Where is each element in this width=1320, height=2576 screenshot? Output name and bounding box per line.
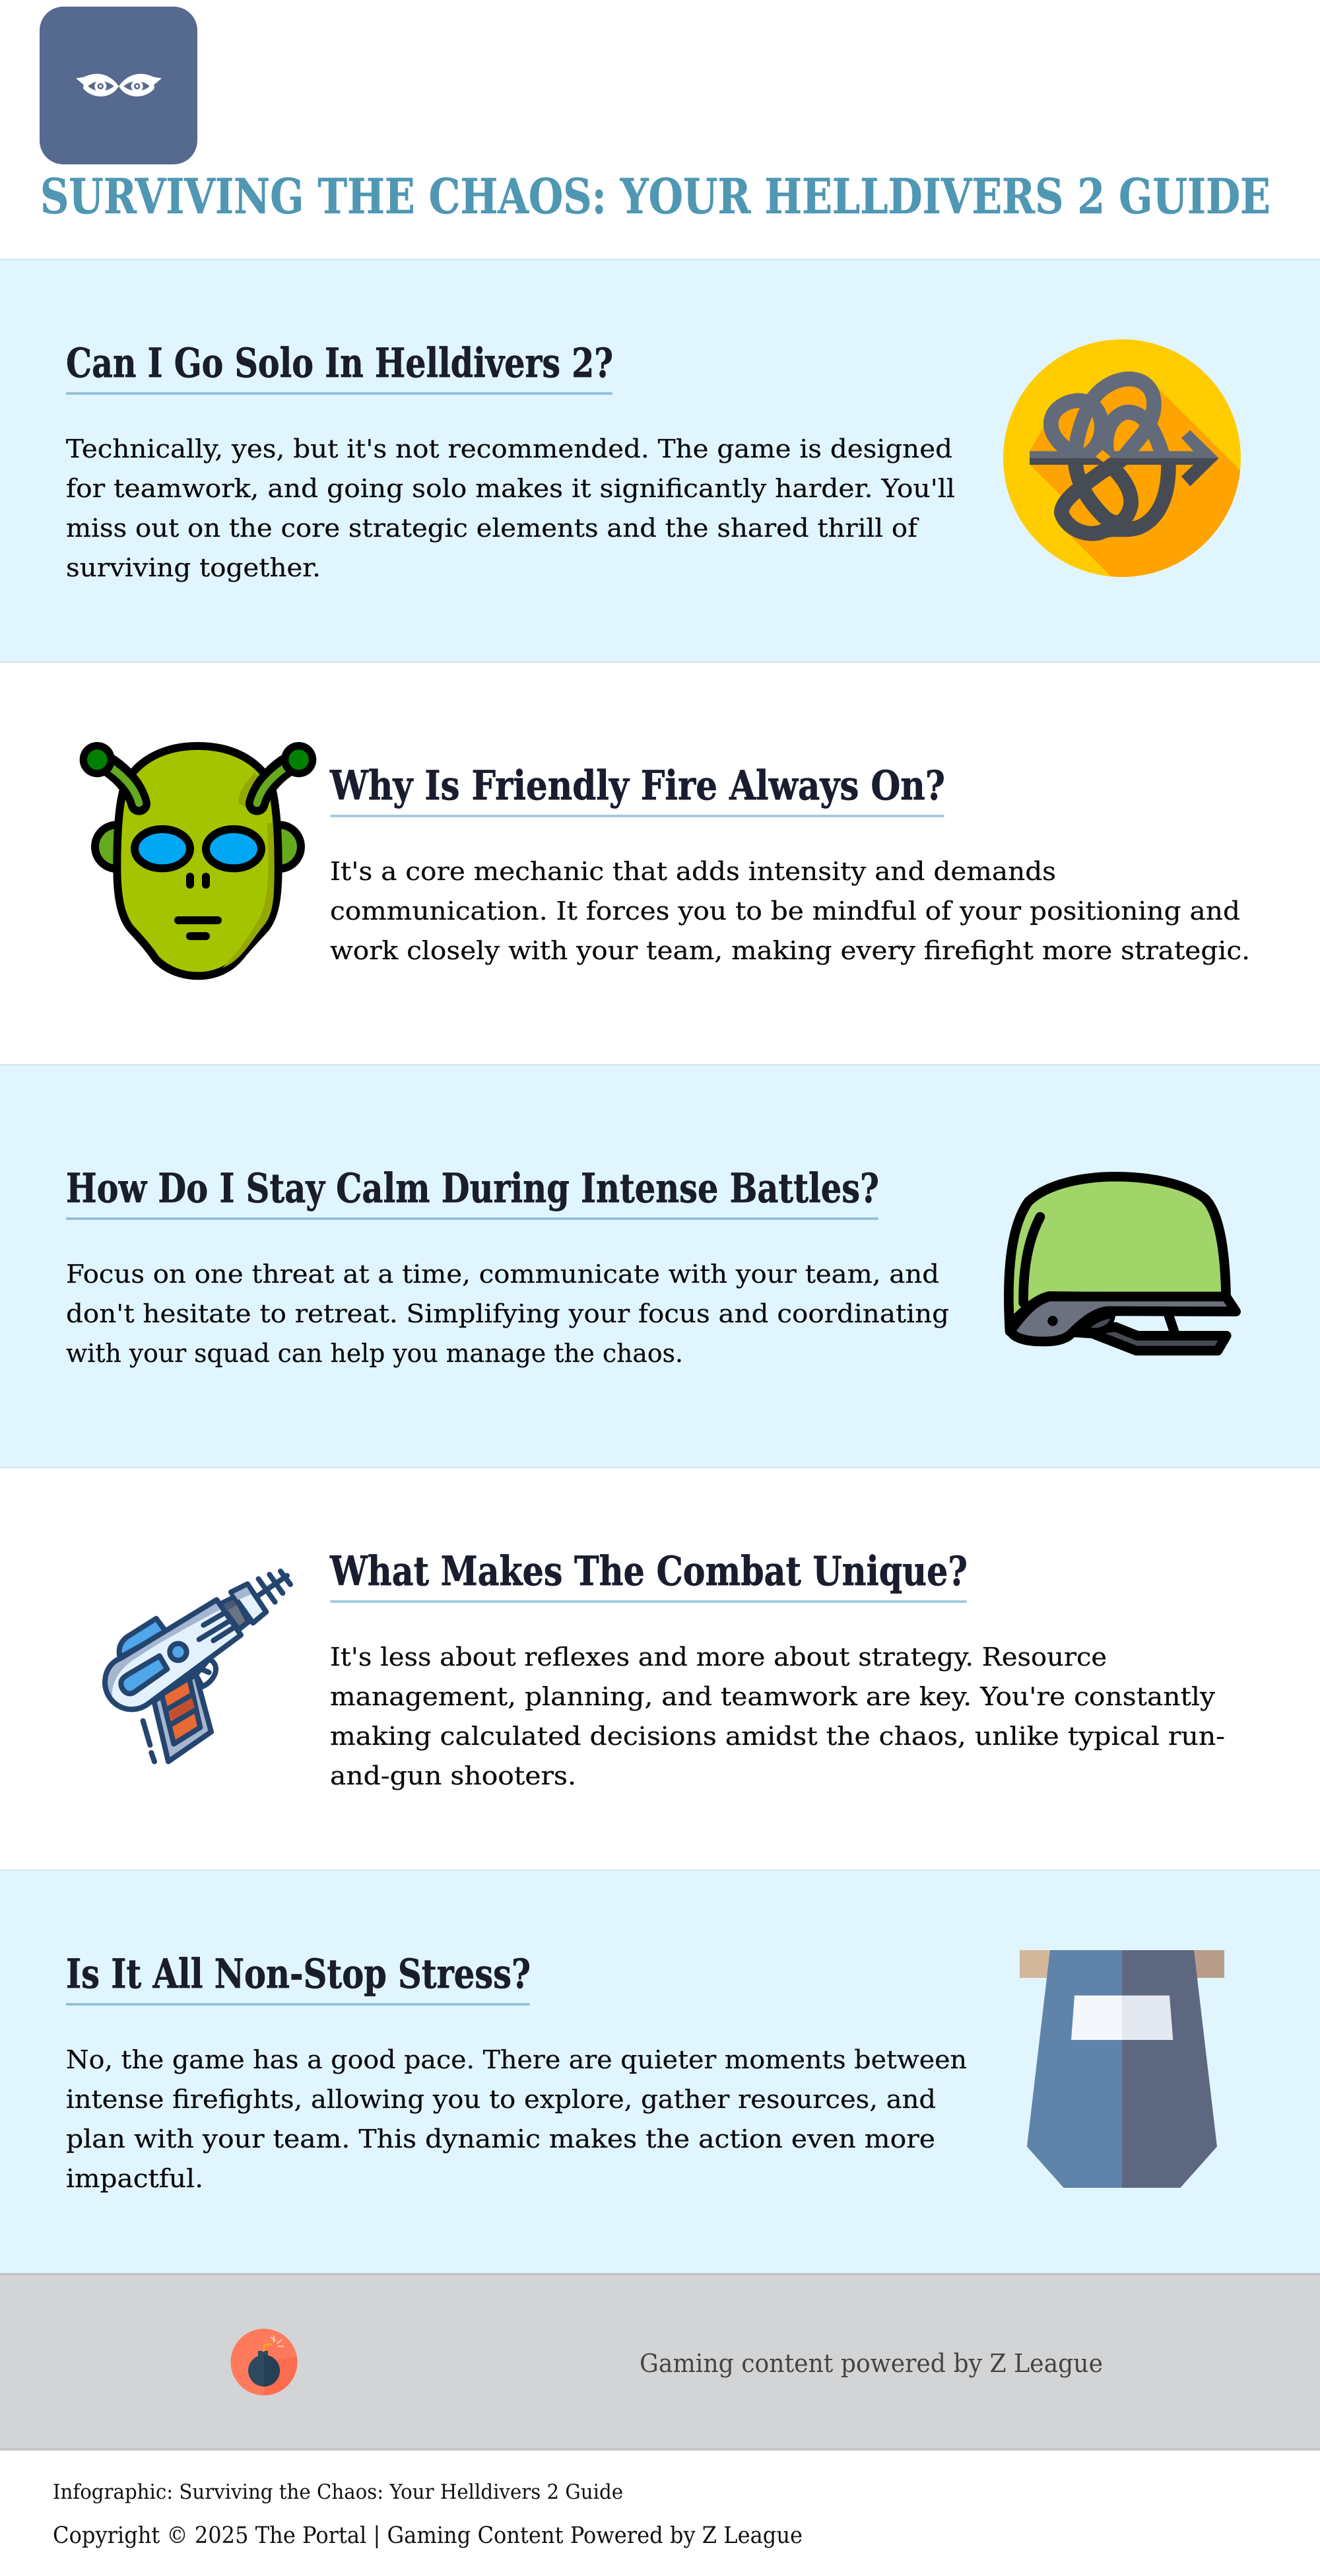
text: non-stop stress: plan with your team. This dynamic makes the action even more <box>66 2124 935 2153</box>
heading: stay calm: How Do I Stay Calm During Intense Battles? <box>66 1165 879 1212</box>
icon: helmet <box>1008 1176 1236 1351</box>
text: stay calm: with your squad can help you manage the chaos. <box>66 1339 683 1368</box>
icon: bomb <box>231 2329 298 2395</box>
text: non-stop stress: impactful. <box>66 2164 203 2193</box>
footer band text: Gaming content powered by Z League <box>640 2349 1103 2378</box>
text: combat unique: making calculated decisions amidst the chaos, unlike typical run- <box>330 1722 1225 1751</box>
text: non-stop stress: intense firefights, allowing you to explore, gather resources, and <box>66 2085 936 2114</box>
icon: alien head <box>80 742 316 976</box>
panel: friendly fire <box>0 661 1320 1064</box>
text: stay calm: don't hesitate to retreat. Simplifying your focus and coordinating <box>66 1299 949 1328</box>
heading: can I go solo: Can I Go Solo In Helldivers 2? <box>66 340 613 387</box>
text: can I go solo: miss out on the core strategic elements and the shared thrill of <box>66 514 919 543</box>
text: friendly fire <box>330 857 1250 965</box>
logo <box>40 7 197 164</box>
text: can I go solo: for teamwork, and going solo makes it significantly harder. You'll <box>66 474 955 503</box>
text: combat unique: management, planning, and teamwork are key. You're constantly <box>330 1682 1216 1711</box>
text: friendly fire: It's a core mechanic that adds intensity and demands <box>330 857 1056 886</box>
text: non-stop stress: No, the game has a good pace. There are quieter moments between <box>66 2045 967 2074</box>
text: friendly fire: communication. It forces you to be mindful of your positioning and <box>330 897 1240 926</box>
icon: watching eyes <box>76 74 162 96</box>
text: can I go solo: Technically, yes, but it's not recommended. The game is designed <box>66 434 952 463</box>
icon: shield banner <box>1020 1950 1224 2188</box>
panel: non-stop stress <box>0 1870 1320 2273</box>
text: combat unique <box>330 1643 1225 1790</box>
text: stay calm <box>66 1260 949 1368</box>
text: combat unique: and-gun shooters. <box>330 1761 576 1790</box>
icon: ray gun <box>105 1571 290 1761</box>
footer band <box>0 2273 1320 2451</box>
panel: stay calm <box>0 1064 1320 1467</box>
caption: Infographic: Surviving the Chaos: Your Helldivers 2 Guide <box>53 2480 623 2504</box>
heading: combat unique: What Makes The Combat Unique? <box>329 1548 968 1595</box>
heading: non-stop stress: Is It All Non-Stop Stress? <box>66 1951 531 1998</box>
text: friendly fire: work closely with your team, making every firefight more strategic. <box>330 936 1250 965</box>
copyright: Copyright © 2025 The Portal | Gaming Content Powered by Z League <box>53 2523 803 2549</box>
panel: combat unique <box>0 1467 1320 1870</box>
text: combat unique: It's less about reflexes and more about strategy. Resource <box>330 1643 1107 1672</box>
heading: friendly fire: Why Is Friendly Fire Always On? <box>329 763 945 809</box>
icon: tangled arrow <box>1003 339 1241 577</box>
text: can I go solo <box>66 434 955 582</box>
text: non-stop stress <box>66 2045 967 2193</box>
text: can I go solo: surviving together. <box>66 553 321 582</box>
panel: can I go solo <box>0 259 1320 662</box>
text: stay calm: Focus on one threat at a time, communicate with your team, and <box>66 1260 939 1289</box>
footer credits <box>0 2451 1320 2576</box>
header <box>0 0 1320 259</box>
